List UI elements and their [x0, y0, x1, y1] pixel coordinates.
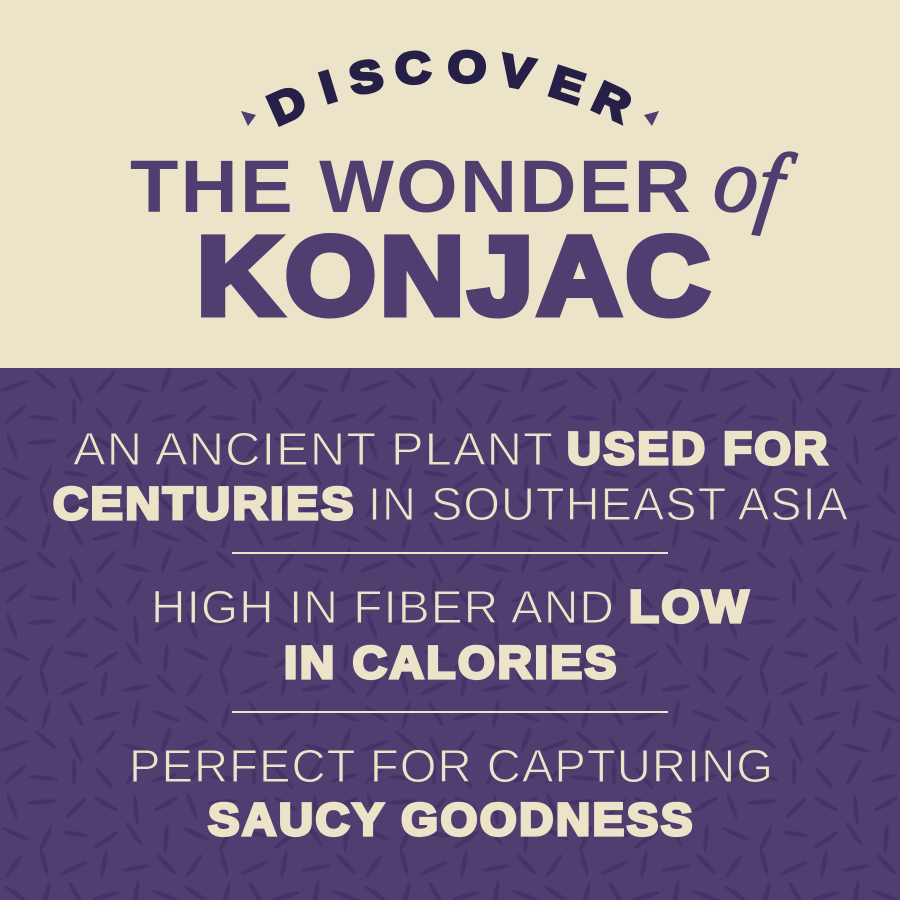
curved heading: DISCOVER [261, 41, 639, 135]
curved heading: DISCOVER: D [261, 75, 313, 135]
icon: left triangle [241, 111, 256, 126]
text block: fact one: USED FOR [567, 423, 830, 474]
text block: fact one: AN ANCIENT PLANT [73, 423, 554, 475]
text block: fact one: IN SOUTHEAST ASIA [368, 478, 849, 530]
text block: fact two [151, 581, 751, 688]
heading: THE WONDER: THE WONDER [130, 145, 693, 228]
script word: of: of [708, 126, 800, 240]
text block: fact three: PERFECT FOR CAPTURING [129, 740, 774, 792]
curved heading: DISCOVER: S [345, 50, 387, 104]
panel: purple patterned facts [0, 368, 900, 900]
text block: fact three [129, 740, 774, 845]
text block: fact one: CENTURIES [53, 478, 356, 529]
curved heading: DISCOVER: O [447, 41, 487, 92]
curved heading: DISCOVER: V [496, 45, 538, 99]
text block: fact two: HIGH IN FIBER AND [151, 581, 615, 633]
text block: fact two: LOW [629, 581, 751, 632]
curved heading: DISCOVER: I [314, 62, 342, 112]
icon: right triangle [644, 111, 659, 126]
text block: fact one [53, 423, 849, 530]
panel: cream header [0, 0, 900, 368]
text block: fact three: SAUCY GOODNESS [208, 794, 695, 845]
curved heading: DISCOVER: E [544, 57, 590, 113]
curved heading: DISCOVER: C [394, 42, 432, 94]
text block: fact two: IN CALORIES [284, 637, 619, 688]
heading: KONJAC: KONJAC [197, 215, 714, 338]
curved heading: DISCOVER: R [586, 72, 639, 132]
